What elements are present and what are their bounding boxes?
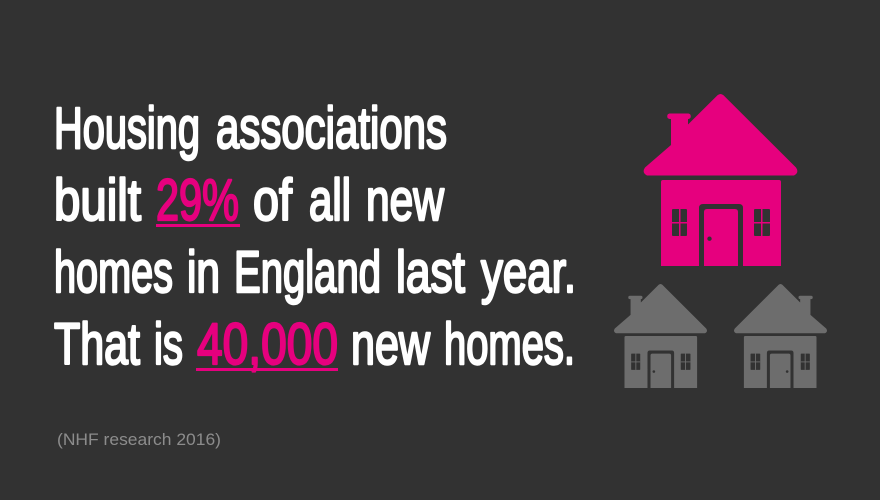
line 3: last bbox=[396, 240, 465, 305]
line 2 with 29% highlight: built bbox=[54, 168, 141, 233]
line 3: year. bbox=[481, 240, 576, 305]
line 2 with 29% highlight: all bbox=[309, 168, 351, 233]
line 3: homes bbox=[54, 240, 173, 305]
line 1: Housing bbox=[54, 96, 200, 161]
line 1: associations bbox=[216, 96, 447, 161]
line 4 with 40,000 highlight: is bbox=[154, 312, 183, 377]
heading: main statement bbox=[54, 96, 576, 377]
line 2 with 29% highlight: 29% bbox=[156, 168, 239, 233]
line 1 bbox=[54, 96, 447, 161]
line 2 with 29% highlight: of bbox=[253, 168, 293, 233]
line 4 with 40,000 highlight: homes. bbox=[444, 312, 575, 377]
icon: large pink house bbox=[644, 94, 797, 266]
line 2 with 29% highlight: new bbox=[366, 168, 445, 233]
line 3: England bbox=[234, 240, 381, 305]
line 3: in bbox=[187, 240, 220, 305]
line 4 with 40,000 highlight: That bbox=[54, 312, 140, 377]
icon: small grey house left bbox=[614, 284, 707, 388]
source note: (NHF research 2016) bbox=[57, 431, 221, 449]
line 4 with 40,000 highlight bbox=[54, 312, 575, 377]
line 4 with 40,000 highlight: new bbox=[351, 312, 431, 377]
line 4 with 40,000 highlight: 40,000 bbox=[197, 312, 338, 377]
line 3 bbox=[54, 240, 576, 305]
icon: small grey house right bbox=[734, 284, 827, 388]
line 2 with 29% highlight bbox=[54, 168, 445, 233]
